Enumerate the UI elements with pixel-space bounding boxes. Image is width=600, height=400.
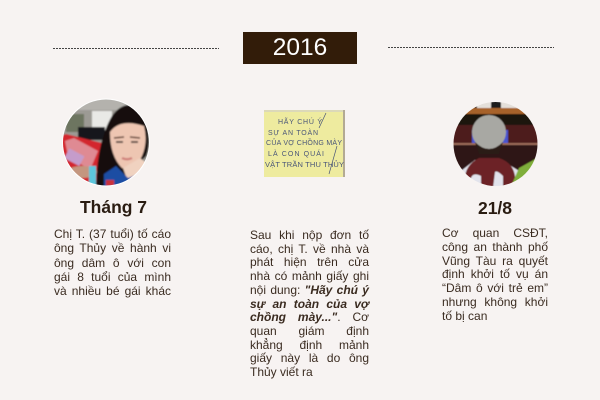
- photo: defendant in court: [454, 102, 538, 186]
- year badge: 2016: [273, 34, 327, 61]
- left dashed divider: [53, 48, 219, 49]
- text: August event: Cơ quan CSĐT,: [442, 226, 548, 240]
- text: note event: khẳng định mảnh: [250, 338, 369, 352]
- photo: handwritten note: CỦA VỢ CHỒNG MÀY: [266, 137, 342, 147]
- text: note event: giấy này là do ông: [250, 351, 369, 365]
- text: note event: phát hiện trên cửa: [250, 255, 369, 269]
- text: note event: quan giám định: [250, 324, 369, 338]
- text: August event: định khởi tố vụ án: [442, 267, 548, 281]
- text: August event: công an thành phố: [442, 240, 548, 254]
- heading: Tháng 7: Tháng 7: [80, 197, 147, 217]
- text: August event: nhưng không khởi: [442, 295, 548, 309]
- text: note event: sự an toàn của vợ: [250, 297, 369, 311]
- photo: woman in car: [62, 98, 150, 186]
- text: note event: chồng mày...". Cơ: [250, 310, 369, 324]
- text: August event: tố bị can: [442, 309, 487, 323]
- photo: handwritten note: HÃY CHÚ Ý: [278, 117, 322, 126]
- year badge: [243, 32, 357, 64]
- text: July event: ông Thủy về hành vi: [54, 241, 171, 255]
- text: August event: Vũng Tàu ra quyết: [442, 254, 548, 268]
- photo: handwritten note: SỰ AN TOÀN: [268, 128, 318, 137]
- text: July event: và nhiều bé gái khác: [54, 284, 171, 298]
- photo: handwritten note: LÀ CON QUÁI: [268, 149, 324, 158]
- photo: handwritten note: VẬT TRẦN THU THỦY: [265, 159, 344, 169]
- text: July event: ông dâm ô với con: [54, 256, 171, 270]
- text: note event: cáo, chị T. về nhà và: [250, 242, 369, 256]
- right dashed divider: [388, 47, 554, 48]
- text: note event: nội dung: "Hãy chú ý: [250, 283, 369, 297]
- text: August event: “Dâm ô với trẻ em”: [442, 281, 548, 295]
- text: July event: Chị T. (37 tuổi) tố cáo: [54, 227, 171, 241]
- photo: handwritten note: [264, 110, 345, 177]
- text: note event: Thủy viết ra: [250, 365, 313, 379]
- text: note event: nhà có mảnh giấy ghi: [250, 269, 369, 283]
- heading: 21/8: 21/8: [478, 198, 512, 218]
- text: August event: [442, 226, 548, 323]
- text: July event: [54, 227, 171, 298]
- text: note event: [250, 228, 370, 379]
- text: note event: Sau khi nộp đơn tố: [250, 228, 369, 242]
- text: July event: gái 8 tuổi của mình: [54, 270, 171, 284]
